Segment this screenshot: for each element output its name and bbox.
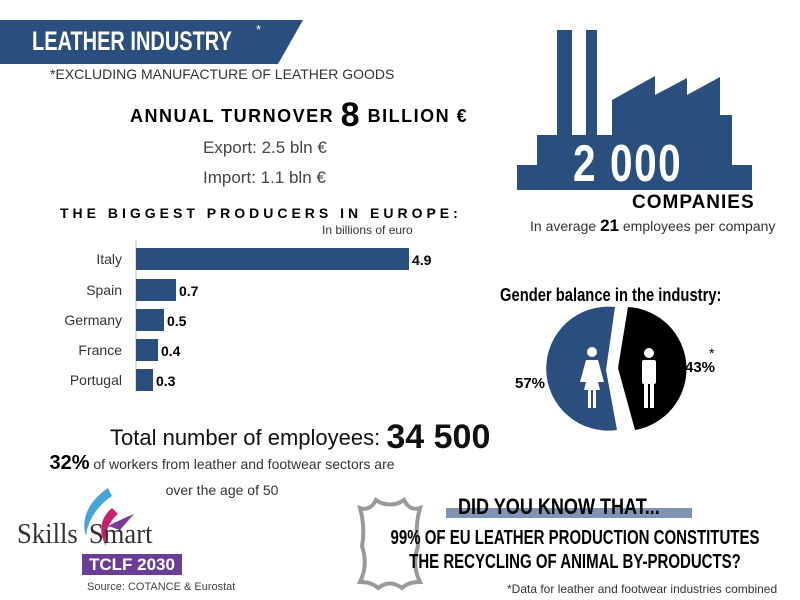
- bar chart: 0.5: [167, 313, 187, 329]
- icon: leather hide: [356, 497, 424, 590]
- bar chart: 4.9: [412, 252, 432, 268]
- workers over 50: over the age of 50: [166, 482, 278, 498]
- total employees: Total number of employees: 34 500: [110, 418, 490, 456]
- bar chart: Italy: [96, 251, 122, 267]
- text: In billions of euro: [322, 223, 413, 237]
- export import: Export: 2.5 bln €: [203, 138, 327, 157]
- source: Source: COTANCE & Eurostat: [87, 581, 235, 593]
- logo: Skills Smart: [17, 488, 182, 575]
- avg employees: In average 21 employees per company: [530, 216, 775, 235]
- workers over 50: [49, 452, 395, 498]
- annual turnover: ANNUAL TURNOVER 8 BILLION €: [130, 96, 468, 134]
- title banner: LEATHER INDUSTRY: [32, 26, 232, 56]
- export import: Import: 1.1 bln €: [203, 168, 326, 187]
- factory icon with 2000: COMPANIES: [632, 192, 755, 213]
- chart heading: THE BIGGEST PRODUCERS IN EUROPE:: [60, 205, 462, 221]
- fact text: THE RECYCLING OF ANIMAL BY-PRODUCTS?: [409, 551, 741, 573]
- bar chart: 0.3: [156, 373, 176, 389]
- factory icon with 2000: [517, 30, 755, 213]
- bar chart: Portugal: [70, 372, 122, 388]
- pie chart: 43%: [685, 359, 715, 376]
- fact text: [391, 527, 759, 573]
- gender heading: Gender balance in the industry:: [500, 285, 721, 305]
- bar chart: 0.7: [179, 283, 199, 299]
- pie chart: [515, 306, 715, 431]
- factory icon with 2000: 2 000: [573, 135, 682, 193]
- bar chart: 0.4: [161, 343, 181, 359]
- fact text: 99% OF EU LEATHER PRODUCTION CONSTITUTES: [391, 527, 759, 549]
- pie chart: *: [709, 345, 715, 361]
- title banner: [0, 20, 303, 64]
- footnote: *Data for leather and footwear industries combined: [507, 582, 777, 596]
- title banner: *: [256, 22, 261, 37]
- did you know heading: DID YOU KNOW THAT...: [458, 494, 660, 519]
- pie chart: 57%: [515, 375, 545, 392]
- workers over 50: 32% of workers from leather and footwear sectors are: [49, 452, 395, 474]
- subtitle note: *EXCLUDING MANUFACTURE OF LEATHER GOODS: [50, 66, 394, 82]
- logo: Skills Smart: TCLF 2030: [89, 555, 175, 574]
- logo: Skills Smart: Skills Smart: [17, 518, 153, 550]
- bar chart: France: [78, 342, 122, 358]
- bar chart: Germany: [64, 312, 122, 328]
- bar chart: [64, 240, 432, 392]
- export import: [203, 138, 327, 187]
- bar chart: Spain: [86, 282, 122, 298]
